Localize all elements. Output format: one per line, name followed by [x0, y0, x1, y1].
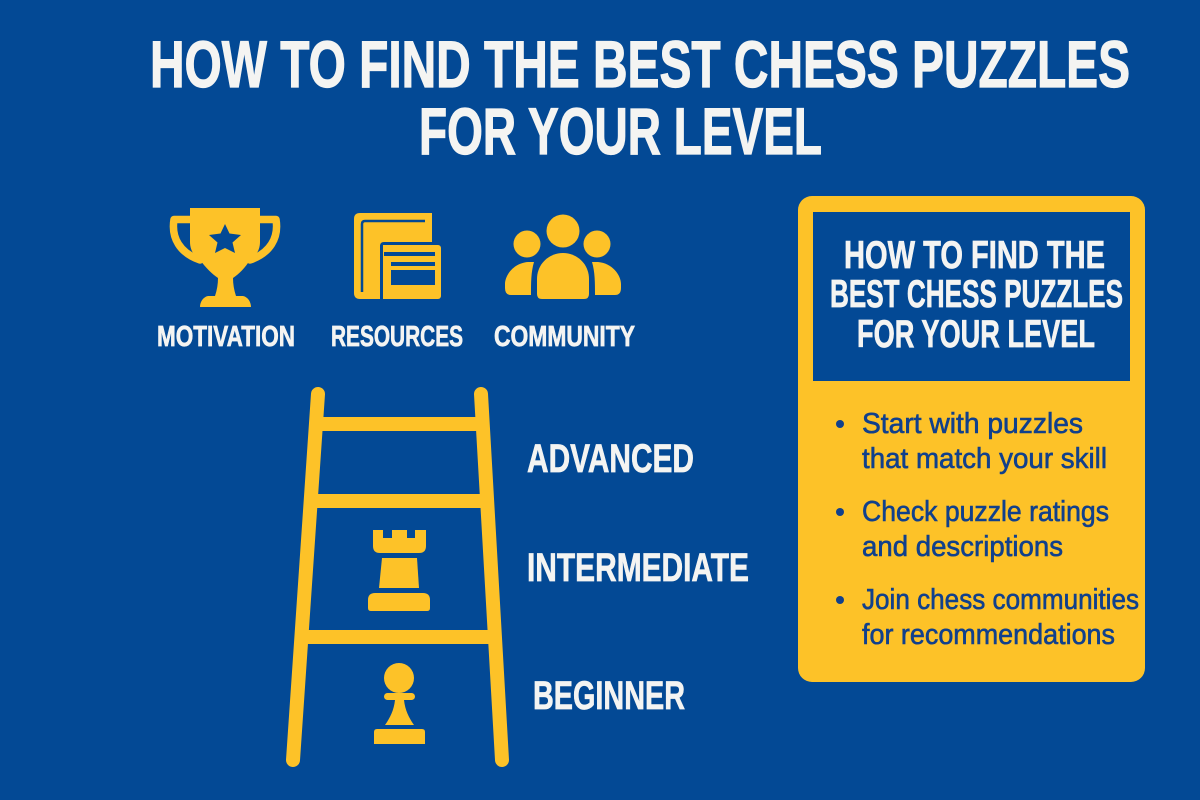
icon: books (resources) — [354, 213, 441, 300]
label: beginner: BEGINNER — [533, 674, 685, 718]
title — [150, 27, 1130, 168]
tip 2: Check puzzle ratings — [862, 496, 1109, 528]
icon: pawn — [374, 663, 425, 744]
label: motivation: MOTIVATION — [157, 321, 295, 353]
icon: rook — [368, 530, 430, 611]
panel: tips — [798, 196, 1145, 682]
label: advanced: ADVANCED — [527, 437, 694, 481]
label: community: COMMUNITY — [494, 321, 635, 353]
tip 2: and descriptions — [862, 531, 1063, 563]
panel heading: HOW TO FIND THE — [844, 234, 1105, 277]
tip 3 — [836, 584, 1139, 651]
tip 1: Start with puzzles — [862, 408, 1083, 440]
ladder — [293, 394, 502, 760]
panel heading — [813, 212, 1130, 381]
label: resources: RESOURCES — [331, 321, 463, 353]
panel heading: FOR YOUR LEVEL — [857, 313, 1095, 356]
tip 1: that match your skill — [862, 443, 1107, 475]
title: FOR YOUR LEVEL — [419, 94, 822, 168]
icon: people (community) — [505, 214, 621, 299]
tip 2 — [836, 496, 1109, 563]
label: intermediate: INTERMEDIATE — [527, 546, 749, 590]
tip 3: Join chess communities — [862, 584, 1139, 616]
tip 1 — [836, 408, 1107, 475]
icon: trophy (motivation) — [173, 208, 277, 307]
tip 3: for recommendations — [862, 619, 1115, 651]
